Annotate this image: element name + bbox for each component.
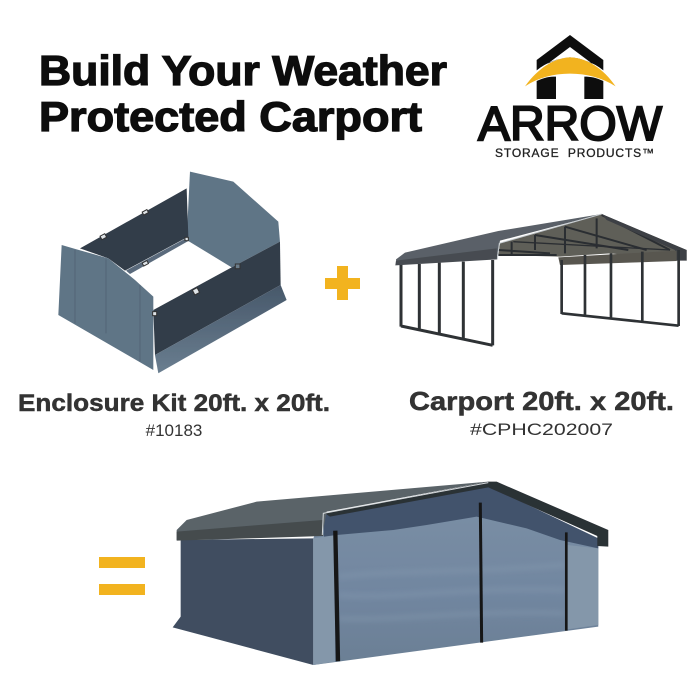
carport left posts and base rails: [401, 260, 493, 345]
carport rafters: [498, 215, 670, 255]
part number: enclosure kit: #10183: [146, 421, 202, 440]
enclosure kit illustration: [58, 172, 287, 373]
carport right roof edge: [602, 214, 687, 261]
wall fabric wrinkles: [338, 565, 565, 619]
icon: plus sign: [325, 266, 360, 300]
title: Protected Carport: [39, 93, 422, 140]
carport roof top: [396, 214, 602, 265]
part number: carport: #CPHC202007: [470, 420, 613, 439]
logo tagline: STORAGE PRODUCTS™: [495, 146, 654, 160]
roof edge: [325, 482, 608, 547]
right enclosure wall: [313, 487, 598, 665]
roof scalloped trim: [322, 483, 488, 535]
logo: Arrow Storage Products: [478, 35, 663, 160]
icon: equals sign: [99, 557, 145, 595]
roof top: [177, 482, 488, 540]
icon: house roof: [525, 35, 616, 99]
front skirt: [155, 285, 287, 373]
caption: enclosure kit: Enclosure Kit 20ft. x 20ft.: [18, 390, 330, 417]
title: Build Your Weather: [39, 47, 447, 94]
right corner panels: [313, 535, 598, 665]
caption: carport: Carport 20ft. x 20ft.: [409, 386, 674, 416]
left enclosure wall: [173, 538, 313, 665]
carport interior roof underside: [498, 214, 687, 261]
black zip strips: [335, 503, 566, 661]
carport illustration: [395, 214, 687, 345]
panel clips: [100, 210, 240, 316]
front side panel: [153, 242, 281, 355]
back side panel: [80, 188, 188, 271]
title: [39, 47, 447, 140]
front left end panel: [58, 245, 153, 370]
carport right posts and base rails: [562, 250, 679, 326]
gable shade: [324, 486, 598, 548]
enclosed carport illustration: [173, 482, 608, 665]
logo wordmark: ARROW: [478, 98, 663, 151]
back right end panel: [187, 172, 280, 267]
